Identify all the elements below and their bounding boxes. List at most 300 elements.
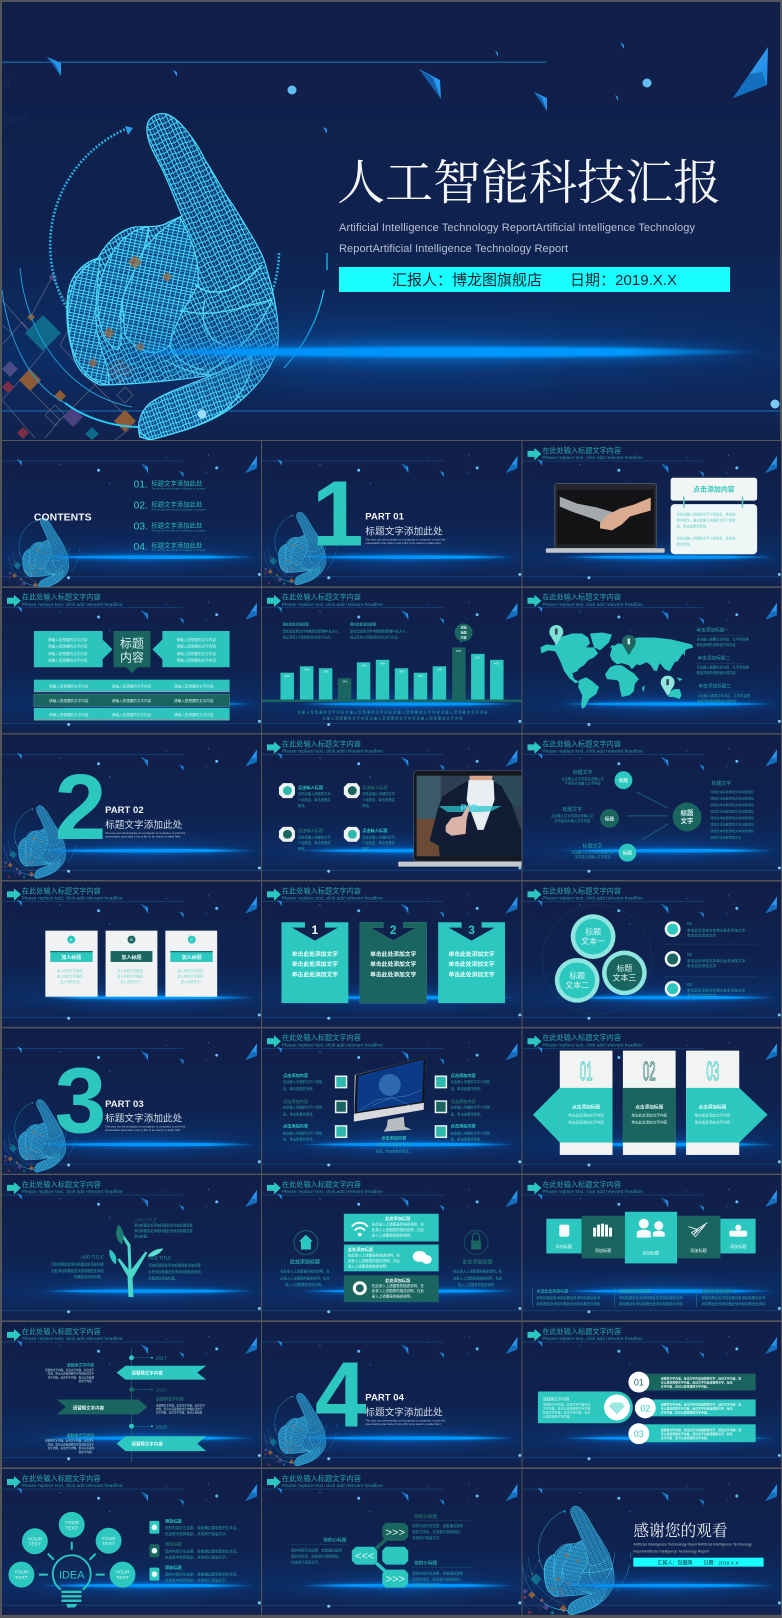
centre label: 内容 — [120, 650, 144, 664]
map pins — [549, 625, 675, 696]
timeline text: 请替换文字内容 — [66, 1363, 94, 1368]
header: Please replace text, click add relevant headline — [542, 602, 643, 607]
box chat: 录入上述图表的描述说明。 — [348, 1263, 390, 1268]
bubble labels: YOUR — [14, 1570, 29, 1576]
chart callout: 添加 — [461, 625, 467, 630]
callout card body — [671, 497, 757, 554]
slide background — [522, 1175, 782, 1320]
slide background — [262, 1028, 532, 1174]
contents heading: CONTENTS — [34, 512, 92, 523]
panel: world map slide — [522, 588, 781, 734]
rows: 请替换文字内容。标注文字内容请替换文字，标注文字内容。您 — [661, 1401, 741, 1406]
header — [267, 1033, 383, 1048]
gem panel — [538, 1392, 633, 1423]
part text — [365, 511, 446, 545]
panel: five icon blocks slide — [522, 1175, 781, 1320]
side paragraph: 添加文本标题添加文本 — [710, 834, 741, 839]
slide background — [2, 1469, 271, 1615]
header: Please replace text, click add relevant headline — [282, 1042, 383, 1047]
side paragraph: 添加文本标题添加文本标题添加 — [710, 796, 754, 801]
part text — [105, 1099, 186, 1132]
header: 在此处输入标题文字内容 — [282, 1033, 361, 1042]
hex top — [382, 1523, 408, 1541]
column 1 — [281, 922, 348, 1003]
box chat: 在此录入上述图表的描述说明，在 — [348, 1252, 401, 1257]
hex text: 您的内容打在这里，或者通过复制 — [412, 1571, 463, 1576]
card 01: 单击此处添加文字内容 — [568, 1120, 604, 1125]
subtitle text: Artificial Intelligence Technology ReportArtificial Intelligence Technology — [633, 1543, 752, 1547]
header: 在此处输入标题文字内容 — [542, 593, 621, 602]
centre label: 标题 — [120, 636, 144, 650]
right arrow panel: 请输入您想要的文字内容 — [177, 657, 216, 662]
header — [527, 1180, 643, 1194]
gem panel: 以直接替换文字内容。 — [543, 1413, 573, 1418]
item list: 01 — [687, 921, 693, 926]
node labels: 点击输入文字内容点击输入文 — [561, 776, 605, 781]
callout card body: 看并修改。通过此输入详细的文字介绍信 — [677, 517, 736, 522]
node labels — [551, 769, 615, 859]
panel: handshake laptop slide — [522, 441, 781, 586]
header: Please replace text, click add relevant headline — [282, 1483, 383, 1488]
bar chart: 20% — [284, 674, 290, 678]
header: 在此处输入标题文字内容 — [542, 446, 621, 455]
dotted ring — [542, 905, 652, 1014]
part text: PART 01 — [365, 511, 405, 522]
part text: presentation and make it into a film to be used in a wider field — [365, 541, 441, 545]
card A: A — [70, 937, 73, 942]
right icon and text: 此录入上述图表的描述说明，在此 — [453, 1275, 503, 1280]
panel: numbered columns slide — [262, 882, 522, 1027]
tree text — [51, 1218, 201, 1280]
header: Please replace text, click add relevant headline — [542, 1042, 643, 1047]
bubble labels: TEXT — [29, 1542, 41, 1548]
circle three: 标题 — [616, 963, 632, 973]
map text: 点击输入需要文本内容，文字内容需 — [696, 636, 750, 641]
small hand — [4, 1097, 77, 1173]
column 3: 单击此处添加文字 — [448, 950, 495, 958]
header: 在此处输入标题文字内容 — [542, 1327, 621, 1336]
feature text: 介绍信息，单击查看并 — [362, 797, 396, 802]
header — [267, 1474, 383, 1488]
light streak — [11, 1126, 271, 1163]
contents list: 标题文字添加此处 — [151, 479, 203, 488]
contents list: The user can demonstrate on projector or computer — [151, 488, 206, 491]
footnote: 请输入您想要的文字内容请输入您想要的文字内容请输入您想要的文字内容 — [322, 715, 463, 720]
column 1: 单击此处添加文字 — [292, 950, 338, 958]
header: 在此处输入标题文字内容 — [282, 739, 361, 748]
connectors — [376, 1540, 386, 1549]
feature text: 介绍信息，单击查看并 — [298, 840, 331, 845]
text blocks — [282, 622, 409, 639]
subtitle text — [339, 222, 696, 255]
tree text: 此处添加标题此处添加标题此处添加 — [51, 1268, 104, 1273]
bulb rays — [39, 1542, 105, 1575]
contents list: 04. — [133, 542, 148, 553]
card C: 加入标题 — [182, 954, 202, 961]
nodes: 标题 — [681, 808, 694, 817]
bar chart: 20% — [418, 674, 424, 678]
slide background — [262, 588, 532, 733]
left icon and text: 录入上述图表的描述说明。 — [285, 1282, 325, 1287]
card 03: 03 — [706, 1058, 719, 1086]
timeline middle text: 内容，您可以直接替换文字内容标注文字 — [156, 1407, 203, 1411]
panel: hexagon slide — [262, 1469, 522, 1615]
contents list: 标题文字添加此处 — [151, 520, 203, 529]
feature text: 修改。 — [362, 846, 372, 851]
panel: part 04 slide — [262, 1322, 522, 1468]
header — [7, 1180, 123, 1194]
presenter bar: 汇报人：包图网 — [658, 1560, 692, 1567]
column 1: 1 — [312, 923, 319, 937]
item list: 单击此处添加文本 — [687, 963, 717, 968]
circle three: 文本三 — [612, 972, 636, 982]
header: 在此处输入标题文字内容 — [542, 886, 621, 895]
tree text: ADD TITLE — [134, 1218, 157, 1223]
monitor side text: 在此输入详细的文字介绍 — [376, 1142, 412, 1146]
bottom text columns: 加标题此处添加标题此处添加标题此处添加 — [619, 1301, 683, 1306]
card C — [165, 931, 217, 997]
bubble labels: TEXT — [65, 1525, 78, 1531]
slide background — [2, 588, 271, 733]
gem panel: 请替换文字内容，标注文字内容标注 — [543, 1401, 590, 1406]
slide background — [522, 441, 782, 586]
slide background — [262, 734, 532, 880]
laptop with businesswoman: P2P — [461, 803, 478, 813]
block three — [625, 1212, 677, 1263]
map text: 概括简明的说明该分项内容 — [697, 699, 737, 704]
laptop with businesswoman — [398, 771, 523, 867]
feature text: 点击输入标题 — [298, 784, 324, 790]
map text: 点击输入需要文本内容，文字内容需 — [697, 693, 750, 698]
box chat: 此处添加标题 — [348, 1246, 374, 1252]
header: 在此处输入标题文字内容 — [22, 1327, 101, 1336]
text blocks: 勤云商务1次审批制优劣运行方式。 — [350, 634, 401, 639]
card A: 加入标题 — [61, 954, 81, 961]
box wifi: 录入上述图表的描述说明。 — [372, 1233, 414, 1238]
node labels: 标题文字 — [583, 843, 603, 850]
monitor side text: 信息，单击查看并修改。 — [376, 1148, 412, 1153]
slide background — [522, 1469, 781, 1615]
tree text: 添加标题此处添加标题此处添加标题此处 — [134, 1228, 194, 1233]
part text: The user can demonstrate on a projector or computer, or print the — [105, 831, 186, 835]
card B: 加入你的文字描述， — [117, 968, 146, 973]
timeline axis: 2016 — [156, 1388, 167, 1394]
header: 在此处输入标题文字内容 — [282, 593, 361, 602]
tree text: 添加标题此处添加标题此处添加标题 — [148, 1262, 201, 1267]
part text — [365, 1392, 446, 1426]
monitor side text: 在此输入详细的文字介绍信 — [283, 1079, 323, 1084]
header: Please replace text, click add relevant headline — [542, 1189, 643, 1194]
tree text: ADD TITLE — [81, 1254, 104, 1259]
timeline middle text: 请替换文字内容，标注文字内容，标注文字 — [156, 1403, 205, 1407]
rows: 文字内容，您可以直接替换文字内容。 — [661, 1409, 710, 1414]
idea list: 您的内容打在这里，或者通过复制您的文本后， — [165, 1572, 240, 1577]
slide background — [262, 441, 522, 586]
ribbon 1: 请替换文字内容 — [132, 1370, 163, 1377]
subtitle text: Artificial Intelligence Technology ReportArtificial Intelligence Technology — [339, 222, 696, 234]
card C: 加入你的文字描述， — [177, 968, 206, 973]
block five: 添加标题 — [730, 1243, 747, 1249]
title: 人工智能科技汇报 — [337, 157, 721, 210]
timeline axis: 2017 — [156, 1356, 167, 1362]
card 03: 单击此处添加文字内容 — [695, 1113, 731, 1118]
bottom text columns: 点击此处添加标题 — [619, 1289, 651, 1294]
rows: 03 — [634, 1429, 644, 1439]
tree text: 标题此处添加标题。 — [74, 1274, 104, 1279]
timeline text: 请替换文字内容，标注文字内容，标注文字 — [45, 1439, 95, 1443]
rows — [628, 1372, 756, 1444]
small hand — [8, 516, 80, 590]
idea list: 在此框中选择粘贴，并选择只保留文字。 — [165, 1531, 229, 1536]
hex left: <<< — [355, 1551, 374, 1563]
bar chart: 60% — [456, 649, 462, 653]
item list — [665, 921, 758, 998]
contents list: 标题文字添加此处 — [151, 500, 203, 509]
bottom text columns: 添加标题此处添加标题此处添加标题此处添 — [536, 1295, 601, 1300]
part text: 标题文字添加此处 — [105, 819, 183, 831]
header — [267, 886, 383, 901]
light streak — [11, 539, 271, 575]
feature text: 修改。 — [298, 846, 308, 851]
feature text: 请在此输入详细的文字 — [298, 791, 331, 796]
slide background — [522, 588, 782, 733]
slide background — [262, 1469, 532, 1615]
rows: 请替换文字内容。标注文字内容请替换文字，标注文字内容。您 — [661, 1427, 741, 1432]
timeline text — [45, 1363, 95, 1454]
tree text: 此处添加标题此处添加标题此处添加 — [148, 1269, 201, 1274]
block four — [677, 1216, 720, 1258]
box gear: 此录入上述图表的描述说明，在此 — [372, 1288, 424, 1293]
bottom text columns: 添加标题此处添加标题此处添加标题此处添 — [701, 1295, 766, 1300]
header: Please replace text, click add relevant headline — [282, 602, 383, 607]
card 03 — [686, 1051, 739, 1155]
panel: bar chart slide — [262, 588, 522, 734]
side paragraph: 添加文本标题添加文本标题添加 — [710, 828, 754, 833]
light streak — [30, 297, 782, 407]
callout card body: 看并修改。 — [677, 541, 693, 546]
panel: monitor slide — [262, 1028, 522, 1174]
three rows: 请输入您想要的文字内容 — [174, 684, 214, 689]
footnote: 请输入您想要的文字内容请输入您想要的文字内容请输入您想要的文字内容请输入您想要的文字内容 — [297, 709, 488, 714]
chart callout — [455, 624, 473, 643]
header — [527, 1033, 643, 1048]
item list: 03 — [687, 982, 693, 987]
header: 在此处输入标题文字内容 — [542, 1033, 621, 1042]
column 3 — [438, 922, 505, 1003]
panel: gem list slide — [522, 1322, 781, 1468]
slide background — [2, 1322, 271, 1467]
contents list: 02. — [133, 501, 148, 512]
right icon and text: 录入上述图表的描述说明。 — [458, 1282, 497, 1287]
left arrow panel: 请输入您想要的文字内容 — [48, 643, 88, 648]
hex text — [291, 1513, 472, 1587]
callout card top — [671, 478, 757, 501]
feature text: 请在此输入详细的文字 — [362, 791, 396, 796]
callout card top: 点击添加内容 — [693, 485, 735, 494]
three rows: 请输入您想要的文字内容 — [112, 712, 152, 717]
column 1: 单击此处添加文字 — [292, 970, 338, 978]
box chat: 此录入上述图表的描述说明，在此 — [348, 1258, 401, 1263]
header: Please replace text, click add relevant headline — [22, 1336, 123, 1341]
monitor side text: 息，单击查看并修改。 — [283, 1086, 316, 1091]
timeline text: 内容，您可以直接替换文字内容标注文字 — [48, 1443, 95, 1447]
tree text: 标题此处添加标题。 — [148, 1275, 178, 1280]
big number: 1 — [312, 461, 364, 565]
light streak — [271, 539, 532, 575]
bottom text columns: 点击此处添加标题 — [701, 1289, 733, 1294]
card 02: 02 — [643, 1058, 656, 1086]
header: 在此处输入标题文字内容 — [22, 886, 101, 895]
light streak — [271, 1420, 532, 1456]
card 02: 单击此处添加文字内容 — [631, 1113, 668, 1118]
node labels: 点击输入文字内容点击输入文 — [571, 850, 615, 855]
text blocks: 请在此处添加标题 — [350, 622, 377, 627]
panel: network diagram slide — [522, 734, 781, 880]
circle one — [571, 914, 615, 959]
bubbles — [8, 1512, 135, 1588]
slide background — [522, 882, 782, 1027]
box gear: 录入上述图表的描述说明。 — [372, 1294, 414, 1299]
bottom text columns: 添加标题此处添加标题此处添加标题此处添 — [619, 1295, 683, 1300]
thank you heading: 感谢您的观看 — [633, 1522, 728, 1540]
hex left — [352, 1547, 377, 1565]
column 2: 单击此处添加文字 — [370, 970, 417, 978]
contents list — [133, 479, 206, 553]
bottom text columns: 点击此处添加标题 — [536, 1289, 568, 1294]
idea list: 在此框中选择粘贴，并选择只保留文字。 — [165, 1578, 229, 1583]
rows: 可以直接替换文字内容。标注文字内容请替换文字，标注 — [661, 1405, 733, 1410]
panel: timeline slide — [2, 1322, 261, 1468]
slide background — [262, 1322, 522, 1467]
monitor side text: 点击添加内容 — [283, 1123, 309, 1129]
text blocks: 您在您这里文件电脑赞助着赚中去大小， — [350, 629, 409, 633]
card 02: 点击添加标题 — [635, 1104, 664, 1111]
circle two — [555, 958, 600, 1003]
panel: P2P laptop slide — [262, 734, 522, 880]
part text: PART 04 — [365, 1392, 405, 1403]
light streak — [532, 1567, 782, 1604]
hex bottom — [382, 1570, 408, 1588]
bar chart: 28% — [323, 670, 329, 674]
big number: 3 — [55, 1049, 106, 1153]
presenter bar: 汇报人：博龙图旗舰店 — [392, 272, 542, 289]
feature text: 点击输入标题 — [298, 827, 324, 833]
card A: 加入你的文字描述， — [57, 973, 86, 978]
header: Please replace text, click add relevant headline — [282, 749, 383, 754]
part text: 标题文字添加此处 — [365, 525, 443, 537]
bubble labels: TEXT — [15, 1575, 28, 1581]
block five — [720, 1219, 756, 1253]
panel: circle cluster slide — [522, 882, 781, 1027]
monitor icons — [335, 1075, 447, 1138]
map text: 概括简明的说明该分项内容 — [696, 642, 736, 647]
node labels: 点击输入文字内容点击输入文 — [551, 813, 594, 818]
side paragraph: 标题文字 — [711, 780, 731, 787]
bar chart: 30% — [304, 668, 310, 672]
left arrow panel: 请输入您想要的文字内容 — [48, 657, 88, 662]
header: 在此处输入标题文字内容 — [22, 1474, 101, 1483]
map text — [696, 627, 750, 704]
centre label — [114, 631, 150, 673]
card B — [106, 931, 157, 997]
bottom text columns: 加标题此处添加标题此处添加标题此处添加 — [536, 1301, 601, 1306]
node labels: 字内容点击输入文字内容 — [575, 854, 611, 859]
bulb: IDEA — [59, 1570, 85, 1582]
box wifi: 此录入上述图表的描述说明，在此 — [372, 1227, 424, 1232]
feature text: 请在此输入详细的文字 — [362, 834, 396, 839]
big number: 4 — [315, 1342, 367, 1446]
left arrow panel — [34, 631, 113, 667]
three rows: 请输入您想要的文字内容 — [174, 698, 214, 703]
octagon icons — [279, 783, 360, 842]
slide background — [2, 882, 271, 1027]
rows: 可以直接替换文字内容。标注文字内容请替换文字，标注 — [661, 1380, 733, 1385]
hex text: 您的文本后，在此框中选择粘贴， — [412, 1529, 463, 1534]
timeline text: 换文字内容。 — [79, 1450, 94, 1454]
card A: 加入你的文字！ — [60, 979, 82, 984]
hex text: 并选择只保留文字。 — [412, 1582, 443, 1587]
column 2 — [360, 922, 427, 1003]
hex text: 并选择只保留文字。 — [291, 1560, 321, 1565]
three rows: 请输入您想要的文字内容 — [49, 698, 89, 703]
monitor side text: 点击添加内容 — [451, 1072, 477, 1078]
card 01: 点击添加标题 — [572, 1104, 600, 1111]
contents list: The user can demonstrate on projector or computer — [151, 529, 206, 532]
light streak — [11, 832, 271, 869]
idea list: 添加标题 — [165, 1541, 182, 1547]
feature text: 请在此输入详细的文字 — [298, 834, 331, 839]
chart callout: 标题 — [461, 629, 467, 634]
header: Please replace text, click add relevant headline — [22, 1483, 123, 1488]
tree text: 添加标题此处添加标题此处添加标题此处 — [134, 1223, 194, 1228]
column 1: 单击此处添加文字 — [292, 960, 338, 968]
side paragraph: 添加文本标题添加文本标题添加 — [710, 821, 754, 826]
hex text: 您的文本后，在此框中选择粘贴， — [412, 1577, 463, 1582]
side paragraph: 添加文本标题添加文本标题添加 — [710, 789, 754, 794]
hex text: 你的小标题 — [414, 1560, 438, 1567]
header: 在此处输入标题文字内容 — [22, 593, 101, 602]
footnote — [297, 709, 488, 720]
part text: 标题文字添加此处 — [365, 1406, 443, 1418]
node labels: 字内容点击输入文字内容 — [554, 818, 591, 823]
nodes — [600, 771, 701, 862]
timeline text: 请替换文字内容 — [66, 1433, 94, 1438]
three rows: 请输入您想要的文字内容 — [49, 712, 89, 717]
bottom text columns: 加标题此处添加标题此处添加标题此处添加 — [701, 1301, 766, 1306]
card A — [45, 931, 98, 997]
header — [267, 1180, 383, 1194]
circle three — [602, 951, 647, 995]
contents list: 01. — [133, 480, 148, 491]
card 01 — [560, 1051, 612, 1155]
box wifi: 此处添加标题 — [385, 1215, 411, 1221]
gem panel: 标注文字内容，标注文字内容，您可 — [543, 1409, 590, 1414]
timeline axis — [129, 1348, 167, 1462]
header — [7, 1327, 123, 1341]
card C: C — [190, 937, 193, 942]
hex bottom: >>> — [386, 1574, 405, 1586]
big number: 2 — [55, 755, 106, 859]
map text: 单击添加标题三 — [698, 683, 731, 690]
panel: three cards slide — [2, 882, 261, 1027]
header: 在此处输入标题文字内容 — [282, 1180, 361, 1189]
right icon and text: 在此录入上述图表的描述说明，在 — [453, 1268, 503, 1273]
node labels: 字内容点击输入文字内容 — [565, 781, 601, 786]
card B: B — [130, 937, 133, 942]
monitor side text: 息，单击查看并修改。 — [451, 1112, 483, 1117]
block one: 添加标题 — [555, 1243, 572, 1249]
text blocks: 您在您这里文件电脑赞助着赚中去大小， — [282, 629, 341, 633]
